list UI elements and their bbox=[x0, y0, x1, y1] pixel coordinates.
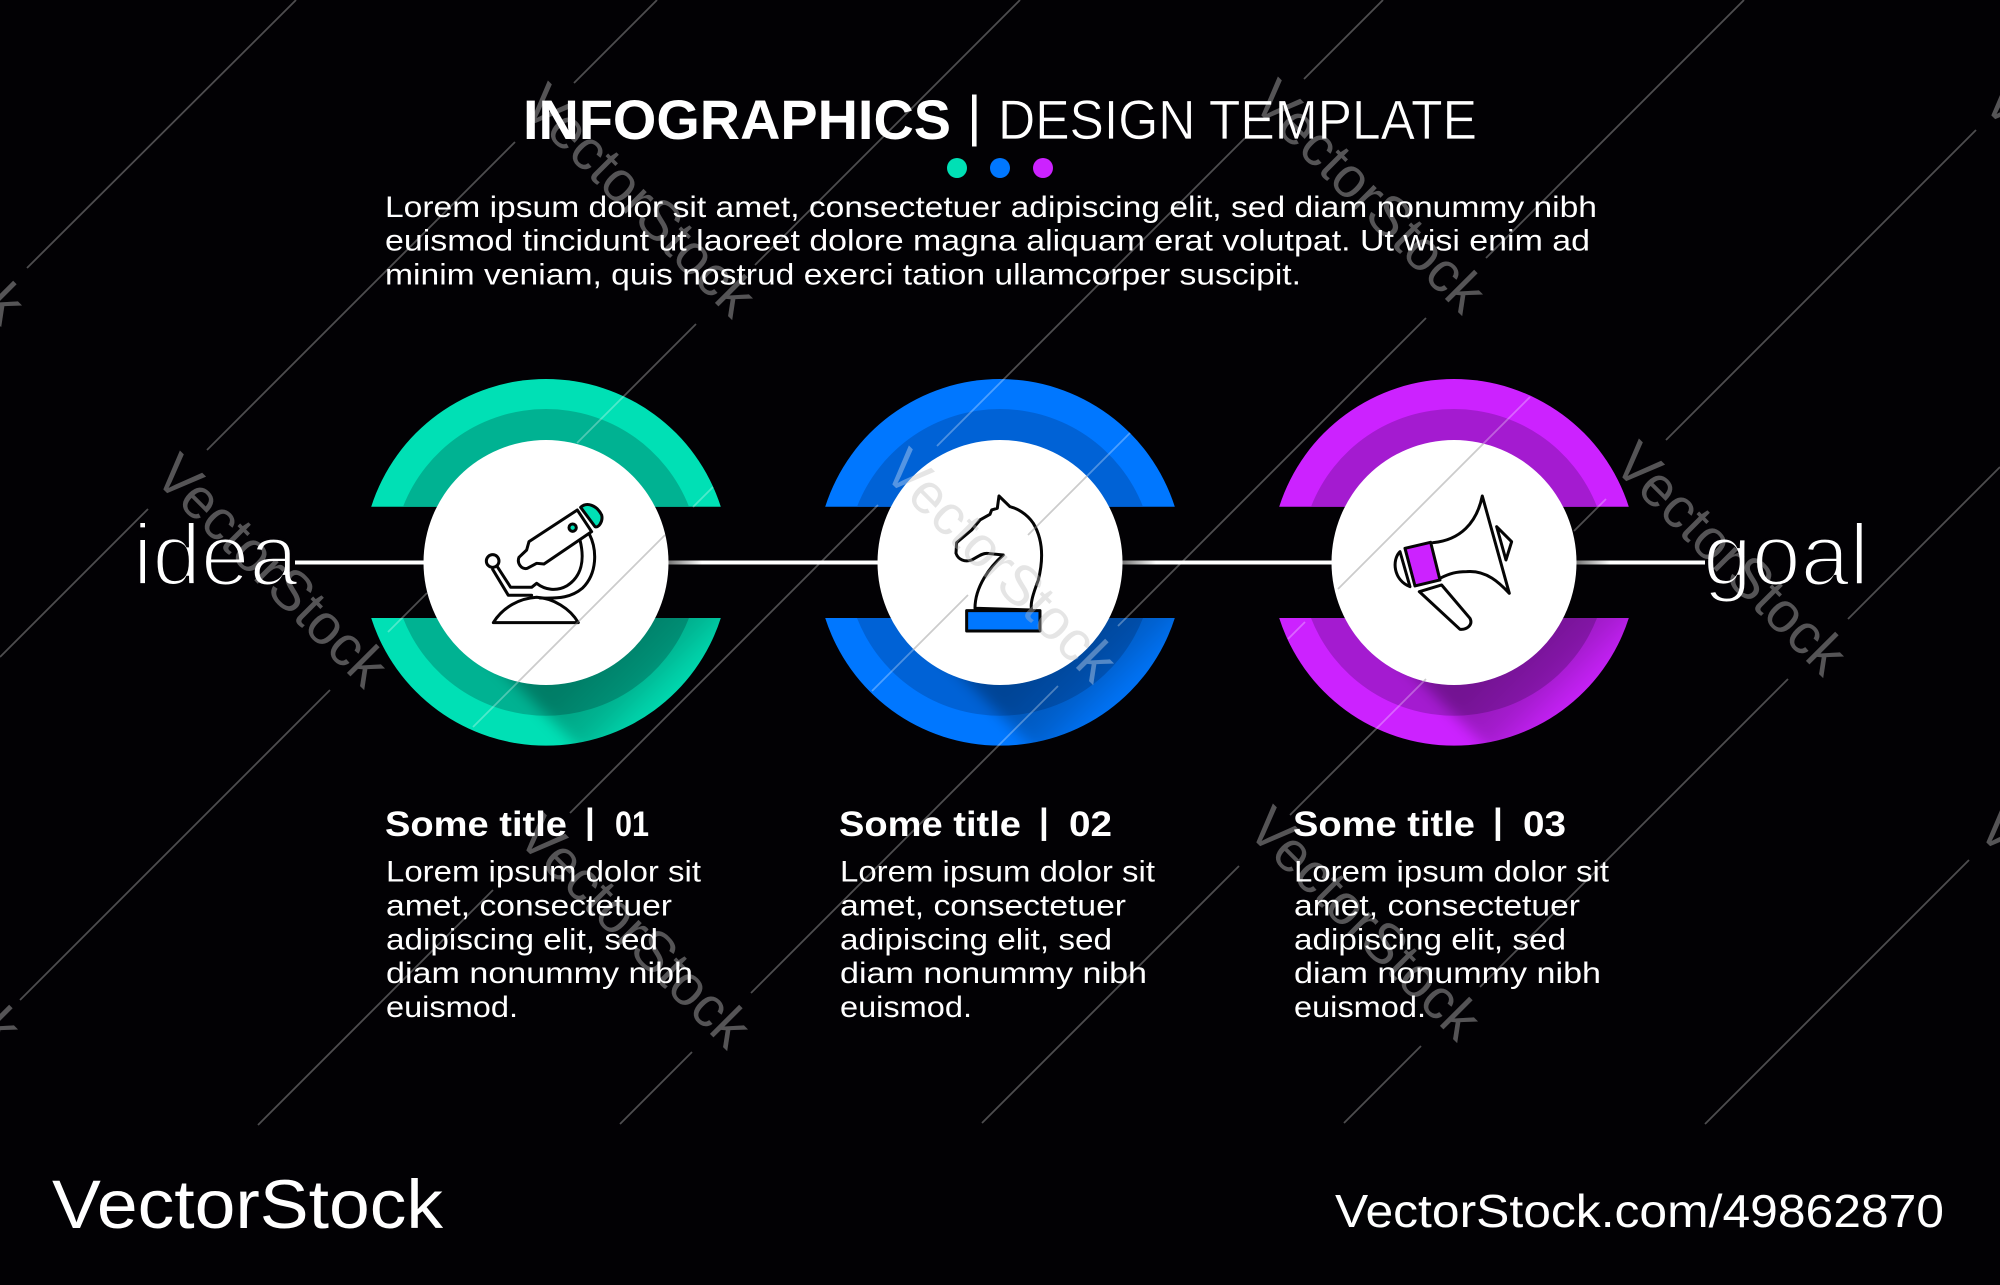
intro paragraph bbox=[385, 191, 1597, 291]
step 3 heading: Some title bbox=[1293, 805, 1475, 844]
step 1 body: adipiscing elit, sed bbox=[386, 923, 658, 956]
step 2 heading: | bbox=[1039, 802, 1049, 841]
step 1 body: euismod. bbox=[386, 991, 518, 1024]
step 3 body: adipiscing elit, sed bbox=[1294, 923, 1566, 956]
step 2 body: diam nonummy nibh bbox=[840, 957, 1147, 990]
step 1 heading bbox=[385, 802, 649, 844]
icon: microscope bbox=[486, 505, 602, 623]
connector line from idea to goal bbox=[295, 560, 1705, 564]
intro paragraph: Lorem ipsum dolor sit amet, consectetuer adipiscing elit, sed diam nonummy nibh bbox=[385, 191, 1597, 224]
step 1 heading: 01 bbox=[615, 805, 649, 844]
three coloured dots bbox=[947, 158, 1053, 178]
title: INFOGRAPHICS bbox=[523, 88, 951, 151]
step 2 body: Lorem ipsum dolor sit bbox=[840, 856, 1156, 889]
step 3 body: diam nonummy nibh bbox=[1294, 957, 1601, 990]
step 2 heading: Some title bbox=[839, 805, 1021, 844]
step 2 body bbox=[840, 856, 1156, 1024]
step 3 purple ring with megaphone bbox=[1279, 379, 1629, 746]
label: goal: goal bbox=[1703, 507, 1869, 604]
step 3 heading bbox=[1293, 802, 1566, 844]
intro paragraph: euismod tincidunt ut laoreet dolore magna aliquam erat volutpat. Ut wisi enim ad bbox=[385, 225, 1590, 258]
step 3 body bbox=[1294, 856, 1610, 1024]
step 3 body: euismod. bbox=[1294, 991, 1426, 1024]
icon: chess knight bbox=[956, 496, 1042, 631]
icon: megaphone bbox=[1395, 496, 1512, 629]
step 2 blue ring with chess knight bbox=[825, 379, 1175, 746]
step 1 body: amet, consectetuer bbox=[386, 890, 672, 922]
step 2 body: adipiscing elit, sed bbox=[840, 923, 1112, 956]
step 3 heading: 03 bbox=[1523, 805, 1566, 844]
step 1 heading: Some title bbox=[385, 805, 567, 844]
title bbox=[523, 84, 1477, 151]
title: | bbox=[967, 84, 982, 147]
step 1 text block bbox=[385, 802, 702, 1024]
step 2 text block bbox=[839, 802, 1156, 1024]
step 2 heading: 02 bbox=[1069, 805, 1112, 844]
step 3 body: Lorem ipsum dolor sit bbox=[1294, 856, 1610, 889]
title: DESIGN TEMPLATE bbox=[998, 88, 1477, 151]
step 1 body bbox=[386, 856, 702, 1024]
step 2 heading bbox=[839, 802, 1112, 844]
footer url: VectorStock.com/49862870 bbox=[1335, 1185, 1944, 1237]
step 1 body: Lorem ipsum dolor sit bbox=[386, 856, 702, 889]
step 3 body: amet, consectetuer bbox=[1294, 890, 1580, 922]
step 3 text block bbox=[1293, 802, 1610, 1024]
step 2 body: amet, consectetuer bbox=[840, 890, 1126, 922]
step 3 heading: | bbox=[1493, 802, 1503, 841]
step 1 body: diam nonummy nibh bbox=[386, 957, 693, 990]
step 1 heading: | bbox=[585, 802, 595, 841]
footer brand: VectorStock bbox=[52, 1166, 444, 1243]
step 1 teal ring with microscope bbox=[371, 379, 721, 746]
label: idea: idea bbox=[133, 507, 299, 604]
step 2 body: euismod. bbox=[840, 991, 972, 1024]
intro paragraph: minim veniam, quis nostrud exerci tation ullamcorper suscipit. bbox=[385, 258, 1301, 291]
